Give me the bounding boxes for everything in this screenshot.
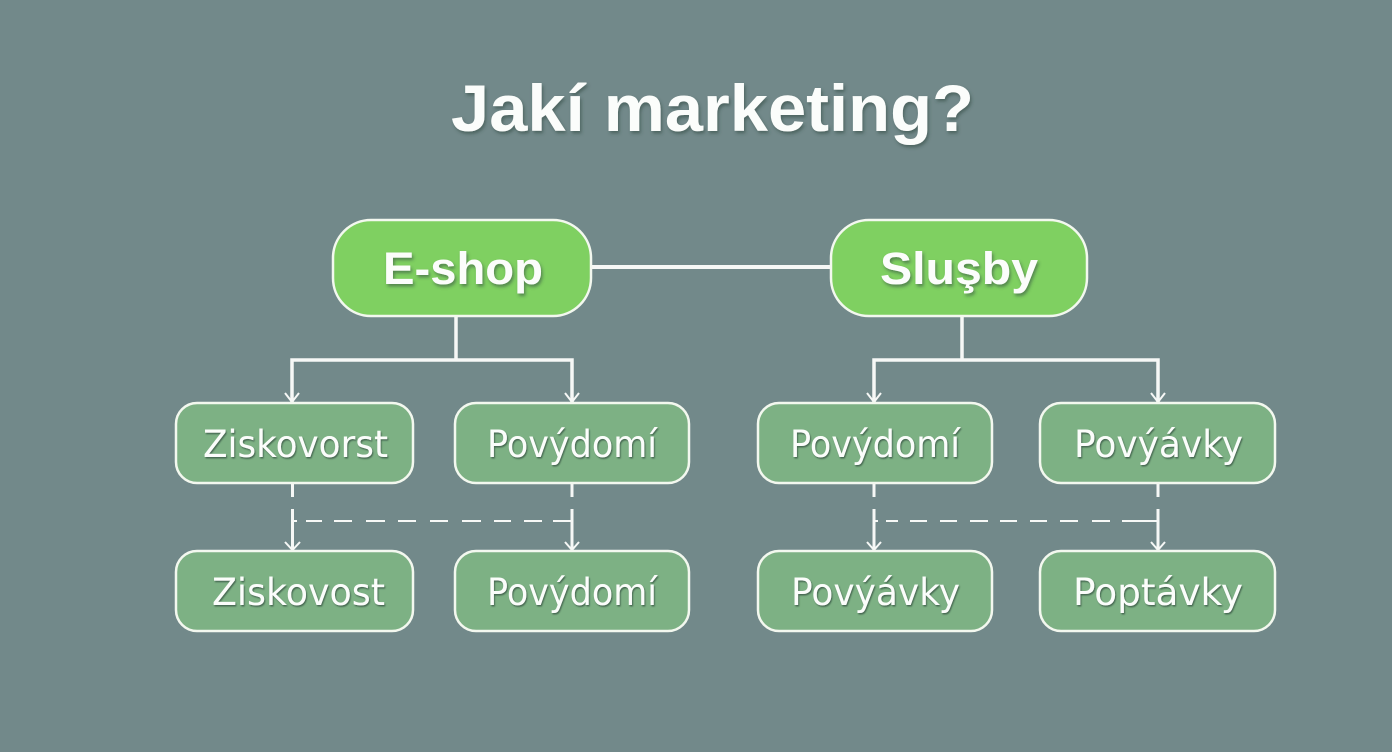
- node: Povýávky (lower): Povýávky: [791, 571, 960, 614]
- arrowhead: Povýdomí: [867, 393, 881, 402]
- arrowhead: Povýdomí: [565, 542, 579, 550]
- arrowhead: Povýávky: [1151, 393, 1165, 402]
- arrowhead: Poptávky: [1151, 542, 1165, 550]
- arrowhead: Ziskovost: [285, 542, 300, 550]
- node: Povýávky (lower): [758, 551, 992, 631]
- connectors: Služby branches: [867, 316, 1165, 402]
- node: Povýdomí (Služby): Povýdomí: [790, 423, 962, 466]
- node: Povýdomí (E-shop lower): Povýdomí: [487, 571, 659, 614]
- node: Poptávky: Poptávky: [1073, 571, 1243, 614]
- node: Povýávky (top): Povýávky: [1074, 423, 1243, 466]
- node: Ziskovost: Ziskovost: [212, 571, 385, 614]
- node: Ziskovorst: [176, 403, 413, 483]
- node: Poptávky: [1040, 551, 1275, 631]
- node: Povýdomí (E-shop): [455, 403, 689, 483]
- connectors: E-shop branches: [285, 316, 579, 402]
- dashed connectors: Služby second level: [867, 484, 1165, 550]
- node: E-shop: [333, 220, 591, 316]
- dashed connectors: E-shop second level: [285, 484, 579, 550]
- node: Ziskovorst: Ziskovorst: [203, 423, 388, 466]
- node: Ziskovost: [176, 551, 413, 631]
- arrowhead: Ziskovorst: [285, 393, 299, 402]
- node: Povýdomí (Služby): [758, 403, 992, 483]
- node: Povýávky (top): [1040, 403, 1275, 483]
- connector: E-shop to Služby: [591, 265, 831, 269]
- node: Služby: Sluşby: [880, 243, 1038, 294]
- title: Jakí marketing?: [451, 71, 974, 145]
- arrowhead: Povýdomí: [565, 393, 579, 402]
- node: Povýdomí (E-shop): Povýdomí: [487, 423, 659, 466]
- node: Povýdomí (E-shop lower): [455, 551, 689, 631]
- arrowhead: Povýávky: [867, 542, 881, 550]
- node: E-shop: E-shop: [383, 243, 543, 294]
- node: Služby: [831, 220, 1087, 316]
